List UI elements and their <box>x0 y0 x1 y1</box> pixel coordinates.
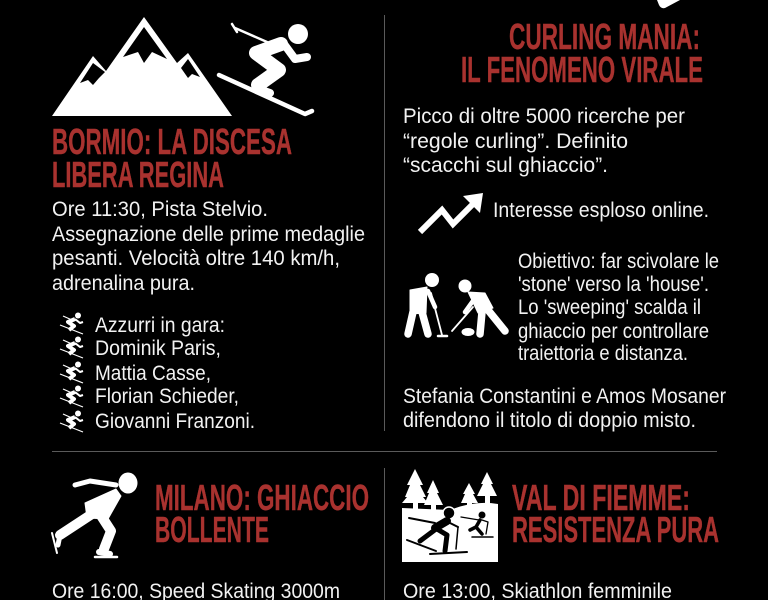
text: Bormio description <box>52 197 365 295</box>
heading: Bormio: LIBERA REGINA <box>52 154 224 195</box>
list: Azzurri in gara: Dominik Paris, <box>95 336 221 360</box>
text: Constantini and Mosaner: Stefania Constantini e Amos Mosaner <box>403 384 726 408</box>
list: Azzurri in gara: Mattia Casse, <box>95 361 211 385</box>
text: Constantini and Mosaner: difendono il titolo di doppio misto. <box>403 408 696 432</box>
icon: speed skater <box>52 472 138 557</box>
list: Azzurri in gara <box>60 312 255 433</box>
text: objective: ghiaccio per controllare <box>518 319 709 343</box>
text: Bormio description: pesanti. Velocità oltre 140 km/h, <box>52 246 340 270</box>
text: objective <box>518 249 719 365</box>
text: objective: traiettoria e distanza. <box>518 341 688 365</box>
heading: Val di Fiemme <box>512 477 719 550</box>
list: Azzurri in gara: Florian Schieder, <box>95 384 239 408</box>
icon: cross-country skiers in forest <box>402 469 498 562</box>
text: Curling description <box>403 104 685 177</box>
text: Bormio description: Ore 11:30, Pista Stelvio. <box>52 197 268 221</box>
text: Constantini and Mosaner <box>403 384 726 432</box>
text: objective: Lo 'sweeping' scalda il <box>518 295 701 319</box>
panel: Milano <box>52 472 369 600</box>
heading: Curling <box>461 16 703 90</box>
heading: Bormio <box>52 121 292 195</box>
panel: Val di Fiemme <box>402 469 719 600</box>
panel: Curling <box>403 16 726 432</box>
text: Curling description: “regole curling”. Definito <box>403 129 628 153</box>
icon: rising arrow <box>420 193 483 232</box>
heading: Milano <box>155 477 369 550</box>
text: objective: 'stone' verso la 'house'. <box>518 272 709 296</box>
list: Azzurri in gara: Giovanni Franzoni. <box>95 409 255 433</box>
icon: downhill skier <box>219 24 312 114</box>
text: Curling description: “scacchi sul ghiaccio”. <box>403 153 608 177</box>
heading: Milano: BOLLENTE <box>155 509 269 550</box>
text: objective: Obiettivo: far scivolare le <box>518 249 719 273</box>
heading: Milano: MILANO: GHIACCIO <box>155 477 369 518</box>
icon: mountains <box>52 17 232 116</box>
text: interest: Interesse esploso online. <box>493 198 709 222</box>
icon: curlers sweeping <box>408 273 505 336</box>
list: Azzurri in gara: Azzurri in gara: <box>95 313 225 337</box>
text: Bormio description: adrenalina pura. <box>52 271 195 295</box>
text: Bormio description: Assegnazione delle prime medaglie <box>52 222 365 246</box>
panel: Bormio <box>52 17 365 433</box>
text: Curling description: Picco di oltre 5000 ricerche per <box>403 104 685 128</box>
heading: Bormio: BORMIO: LA DISCESA <box>52 121 292 162</box>
icon: top arrow fragment <box>657 0 680 8</box>
